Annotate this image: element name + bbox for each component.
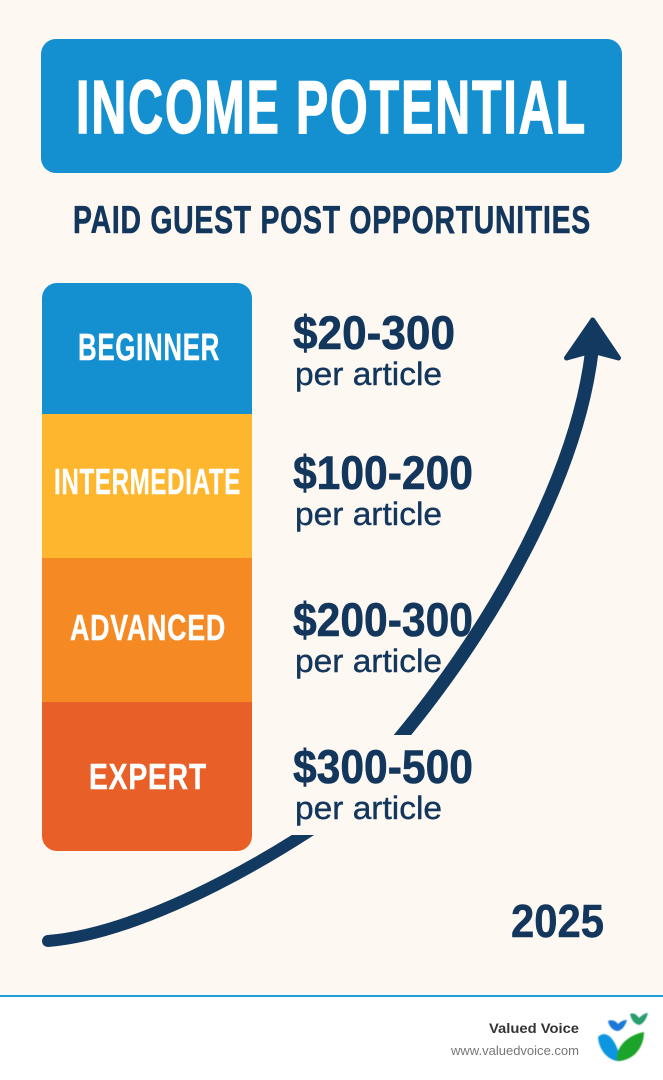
price: beginner: $20-300	[293, 306, 455, 359]
price: expert: $300-500	[293, 740, 473, 793]
footer url: www.valuedvoice.com	[450, 1043, 579, 1058]
level label: beginner: BEGINNER	[78, 327, 220, 369]
footer brand name: Valued Voice	[489, 1020, 579, 1036]
price: beginner: per article	[295, 356, 442, 392]
price: beginner	[293, 306, 455, 392]
price: advanced	[293, 593, 473, 679]
price: advanced: per article	[295, 643, 442, 679]
title banner	[41, 39, 622, 173]
icon: Valued Voice logo	[598, 1013, 648, 1061]
arrow: rising growth curve	[48, 320, 618, 941]
level label: advanced: ADVANCED	[70, 607, 226, 648]
price: expert	[293, 740, 473, 826]
footer	[0, 995, 663, 1080]
year: 2025	[511, 895, 604, 947]
panel: experience level stack	[42, 283, 252, 851]
price: expert: per article	[295, 790, 442, 826]
price: advanced: $200-300	[293, 593, 473, 646]
price: intermediate: per article	[295, 496, 442, 532]
price: intermediate	[293, 446, 473, 532]
level label: expert: EXPERT	[89, 756, 207, 797]
level label: intermediate: INTERMEDIATE	[54, 461, 241, 502]
price: intermediate: $100-200	[293, 446, 473, 499]
